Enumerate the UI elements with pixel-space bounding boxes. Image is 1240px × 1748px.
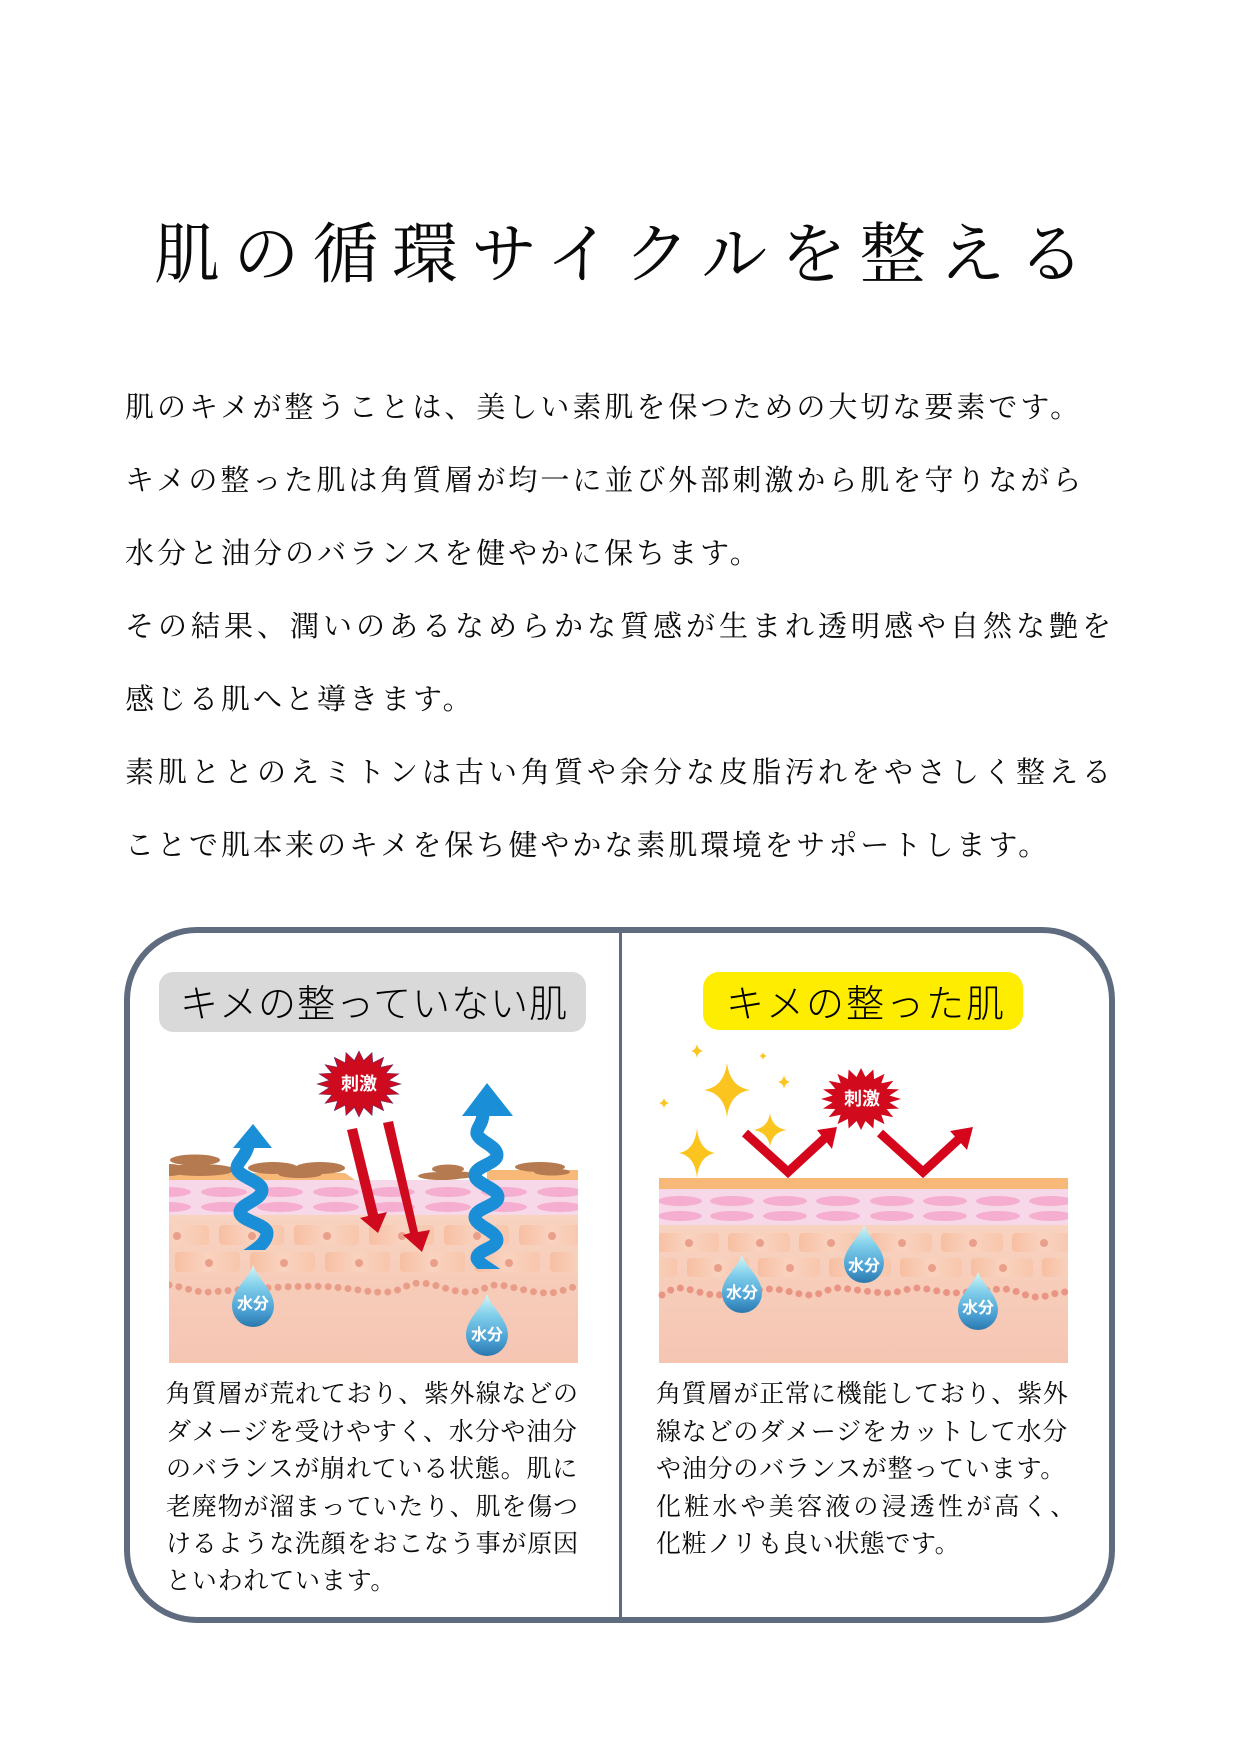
text: even skin description: 線などのダメージをカットして水分 (656, 1418, 1068, 1446)
intro text block: ことで肌本来のキメを保ち健やかな素肌環境をサポートします。 (125, 829, 1050, 862)
icon: water drop right 1 (722, 1255, 762, 1313)
intro text block: キメの整った肌は角質層が均一に並び外部刺激から肌を守りながら (125, 464, 1084, 497)
icon: water drop left 1: 水分 (237, 1295, 269, 1313)
text: even skin description: 角質層が正常に機能しており、紫外 (656, 1380, 1069, 1408)
icon: water drop right 3: 水分 (962, 1299, 994, 1317)
illustration: uneven skin cross section (169, 1154, 578, 1363)
icon: red irritation arrows (347, 1121, 430, 1252)
icon: sparkles (659, 1044, 790, 1178)
dotted membrane (169, 1283, 578, 1293)
icon: irritation burst right (821, 1068, 901, 1130)
text: uneven skin description: 老廃物が溜まっていたり、肌を傷つ (166, 1493, 579, 1521)
icon: irritation burst left (317, 1051, 401, 1117)
heading: uneven skin (159, 972, 586, 1032)
dotted membrane (662, 1288, 1065, 1297)
text: even skin description: や油分のバランスが整っています。 (656, 1455, 1066, 1483)
icon: irritation burst left: 刺激 (341, 1074, 377, 1094)
illustration: even skin cross section (658, 1178, 1068, 1363)
icon: water drop right 3 (958, 1272, 998, 1330)
icon: water drop left 2: 水分 (471, 1326, 503, 1344)
icon: deflected arrow 2 (880, 1127, 973, 1172)
intro text block: 素肌ととのえミトンは古い角質や余分な皮脂汚れをやさしく整える (125, 756, 1115, 789)
text: even skin description: 化粧水や美容液の浸透性が高く、 (656, 1493, 1079, 1521)
comparison panel (127, 930, 1112, 1620)
icon: moisture escaping arrow right (462, 1083, 513, 1274)
text: even skin description: 化粧ノリも良い状態です。 (656, 1530, 960, 1558)
heading: even skin (703, 972, 1023, 1030)
skin cells (659, 1233, 1068, 1277)
pink layer (658, 1189, 1073, 1225)
intro text block: その結果、潤いのあるなめらかな質感が生まれ透明感や自然な艶を (125, 610, 1115, 643)
text: uneven skin description (166, 1380, 579, 1595)
icon: water drop right 1: 水分 (726, 1284, 758, 1302)
icon: moisture escaping arrow left (233, 1124, 272, 1256)
title: 肌の循環サイクルを整える (154, 219, 1098, 292)
text: uneven skin description: のバランスが崩れている状態。肌に (166, 1455, 578, 1483)
text: uneven skin description: けるような洗顔をおこなう事が原因 (166, 1530, 579, 1558)
text: uneven skin description: ダメージを受けやすく、水分や油分 (166, 1418, 578, 1446)
intro text block: 水分と油分のバランスを健やかに保ちます。 (125, 537, 762, 570)
intro text block: 肌のキメが整うことは、美しい素肌を保つための大切な要素です。 (125, 391, 1082, 424)
pink layer (145, 1180, 583, 1215)
icon: deflected arrow 1 (745, 1127, 837, 1172)
skin cells (173, 1225, 578, 1272)
icon: water drop left 1 (232, 1265, 274, 1327)
text: uneven skin description: 角質層が荒れており、紫外線などの (166, 1380, 579, 1408)
heading: uneven skin: キメの整っていない肌 (180, 984, 568, 1026)
text: even skin description (656, 1380, 1079, 1558)
icon: irritation burst right: 刺激 (844, 1089, 880, 1109)
intro text block (125, 391, 1115, 862)
heading: even skin: キメの整った肌 (726, 984, 1006, 1026)
icon: water drop right 2 (844, 1225, 884, 1283)
text: uneven skin description: といわれています。 (166, 1568, 396, 1595)
icon: water drop left 2 (466, 1294, 508, 1356)
rough surface layer (155, 1154, 578, 1180)
intro text block: 感じる肌へと導きます。 (125, 683, 475, 716)
icon: water drop right 2: 水分 (848, 1257, 880, 1275)
